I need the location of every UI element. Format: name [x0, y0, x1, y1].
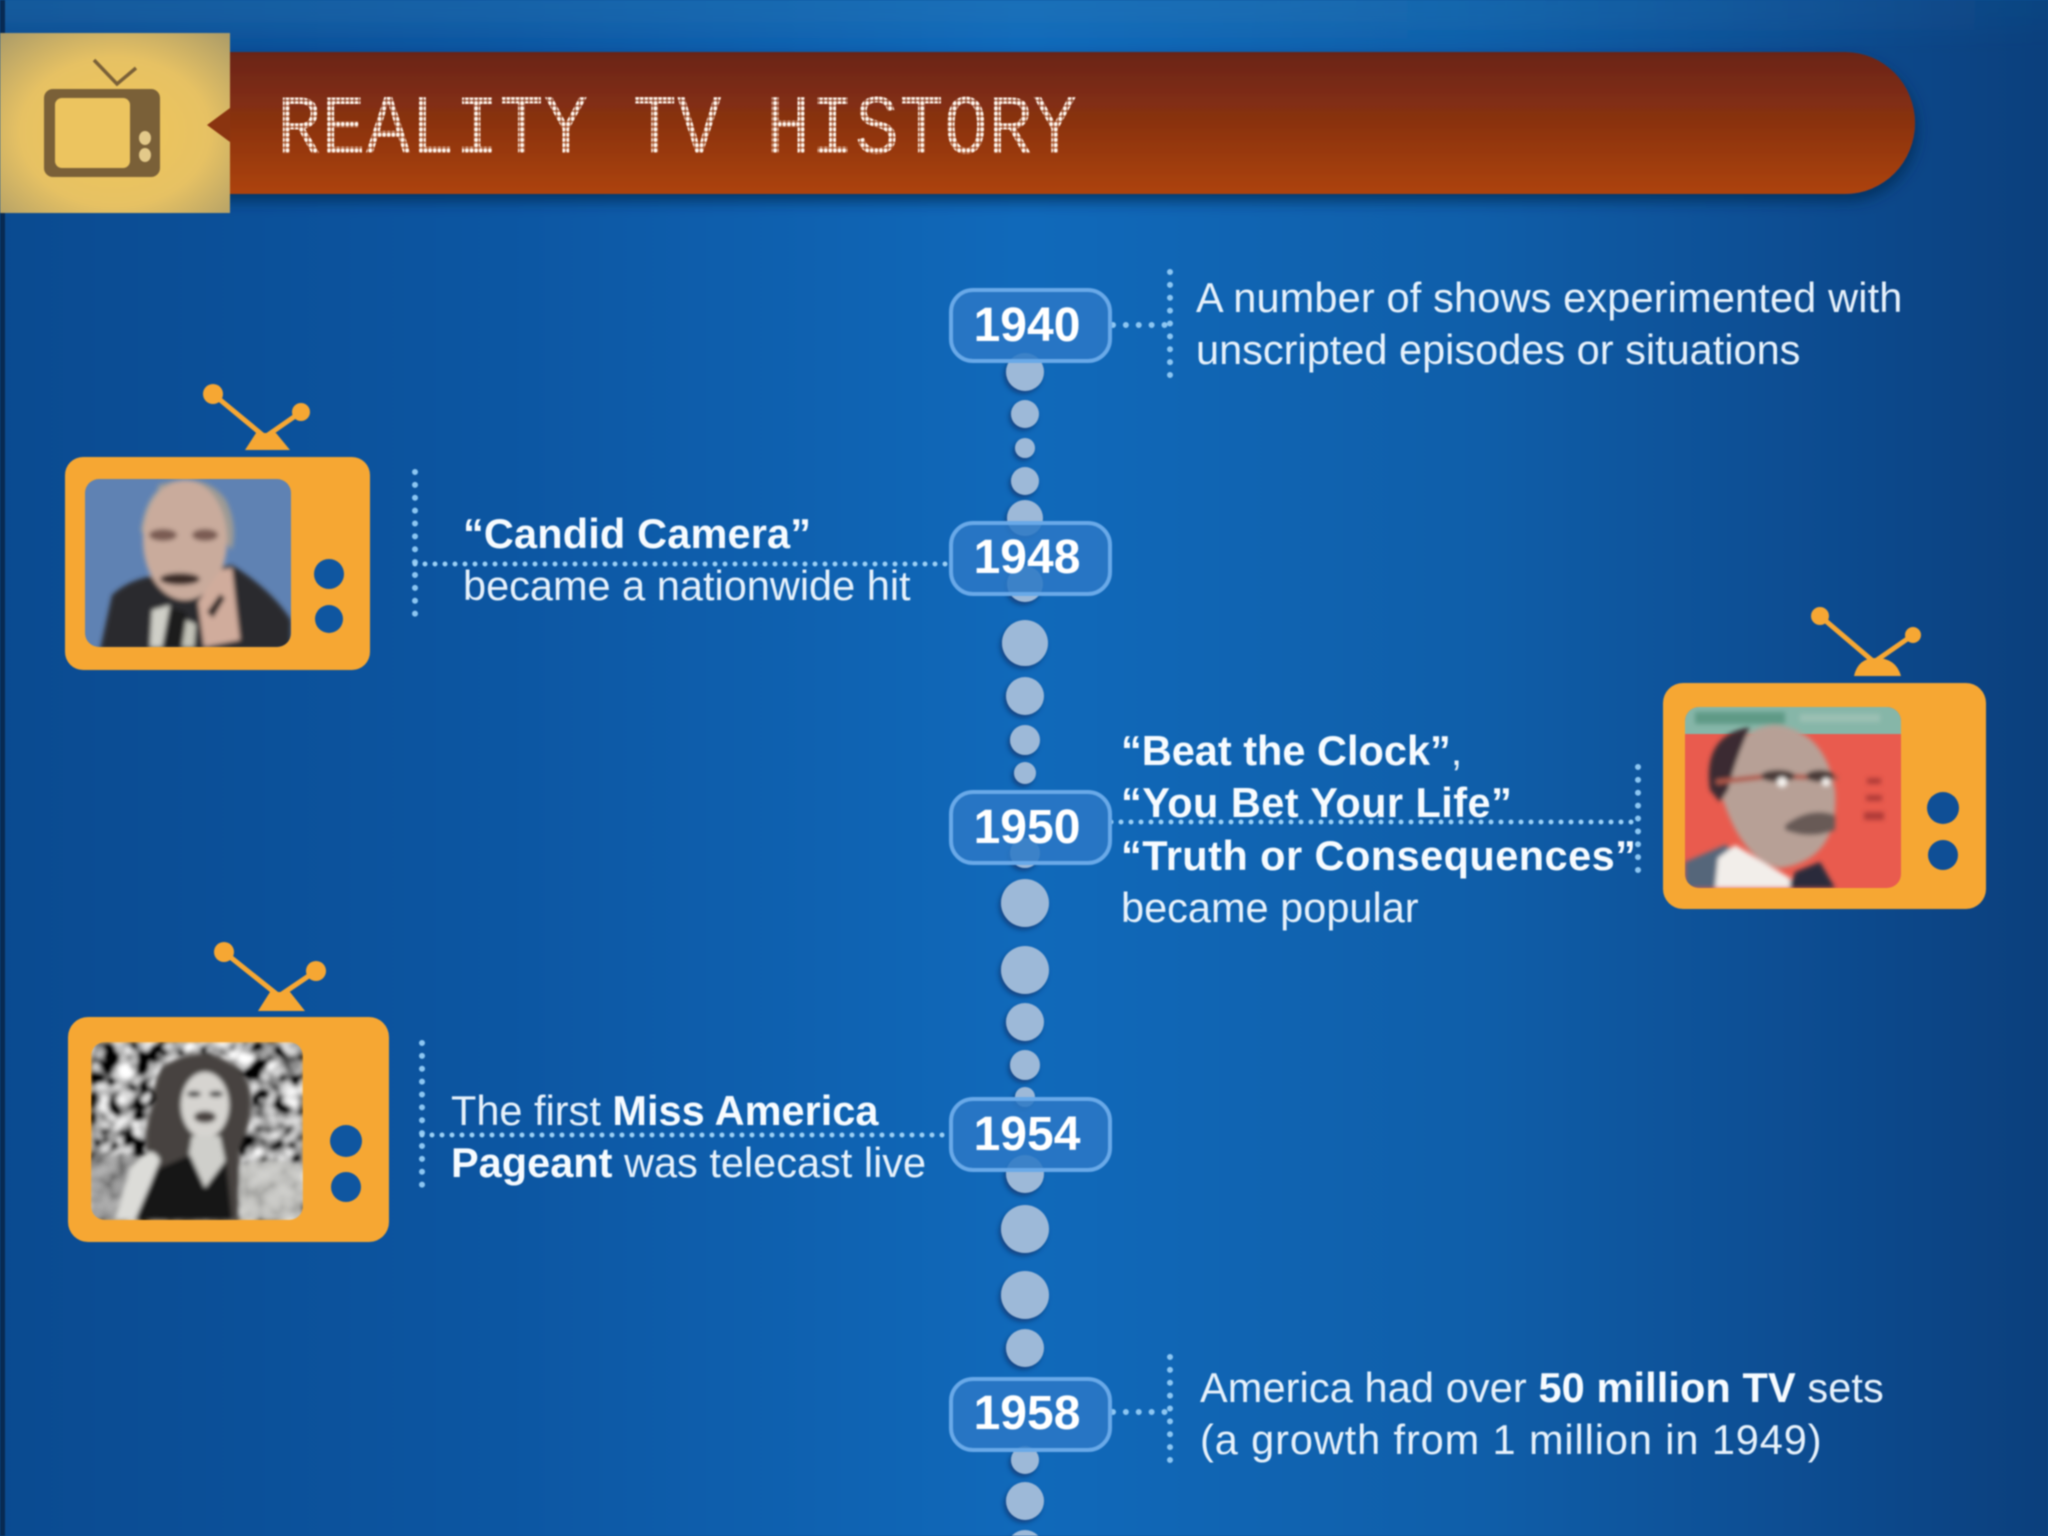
photo: magazine cover — [1685, 707, 1901, 888]
text: 1958: (a growth from 1 million in 1949) — [1200, 1416, 1822, 1463]
TV body — [68, 1017, 389, 1242]
text: 1940: A number of shows experimented with — [1196, 274, 1902, 321]
connector: 1954 — [422, 1043, 949, 1185]
knobs — [1927, 792, 1959, 870]
text: 1950: became popular — [1121, 884, 1419, 931]
year: 1954 — [951, 1099, 1110, 1170]
icon: antenna — [203, 384, 310, 450]
icon: antenna — [214, 942, 326, 1011]
title banner — [200, 52, 1915, 194]
text: 1954: Pageant — [451, 1139, 613, 1186]
knobs — [330, 1125, 362, 1202]
connector: 1940 — [1113, 272, 1170, 375]
title: REALITY TV HISTORY — [277, 83, 1077, 179]
icon: title TV tile — [0, 33, 230, 213]
photo: pageant winner — [91, 1042, 303, 1220]
year: 1958: 1958 — [974, 1387, 1080, 1440]
timeline dots — [1001, 353, 1049, 1536]
TV: Miss America — [68, 942, 389, 1242]
year: 1940: 1940 — [974, 299, 1080, 352]
connector: 1958 — [1113, 1357, 1170, 1460]
text: 1950: “Beat the Clock”, — [1121, 727, 1462, 774]
text: 1940: unscripted episodes or situations — [1196, 326, 1800, 373]
text: 1958: America had over 50 million TV sets — [1200, 1364, 1884, 1411]
text: 1950: “Truth or Consequences” — [1121, 832, 1636, 879]
year: 1948: 1948 — [974, 531, 1080, 584]
photo: host — [85, 479, 291, 650]
icon: antenna — [1811, 607, 1921, 676]
TV body — [1663, 683, 1986, 909]
knobs — [314, 559, 344, 633]
connector: 1948 — [415, 472, 949, 614]
year: 1948 — [951, 523, 1110, 594]
TV body — [65, 457, 370, 670]
text: 1948: became a nationwide hit — [463, 562, 911, 609]
connector: 1950 — [1111, 767, 1638, 873]
year: 1950 — [951, 792, 1110, 863]
text: 1954: was telecast live — [624, 1139, 926, 1186]
year: 1940 — [951, 290, 1110, 361]
TV: Groucho Marx — [1663, 607, 1986, 909]
text: 1950: “You Bet Your Life” — [1121, 779, 1512, 826]
year: 1954: 1954 — [974, 1108, 1081, 1161]
TV: Candid Camera — [65, 384, 370, 670]
text: 1948: “Candid Camera” — [463, 510, 811, 557]
banner bar — [200, 52, 1915, 194]
year: 1950: 1950 — [974, 801, 1080, 854]
text: 1954: The first Miss America — [451, 1087, 878, 1134]
year: 1958 — [951, 1379, 1110, 1450]
